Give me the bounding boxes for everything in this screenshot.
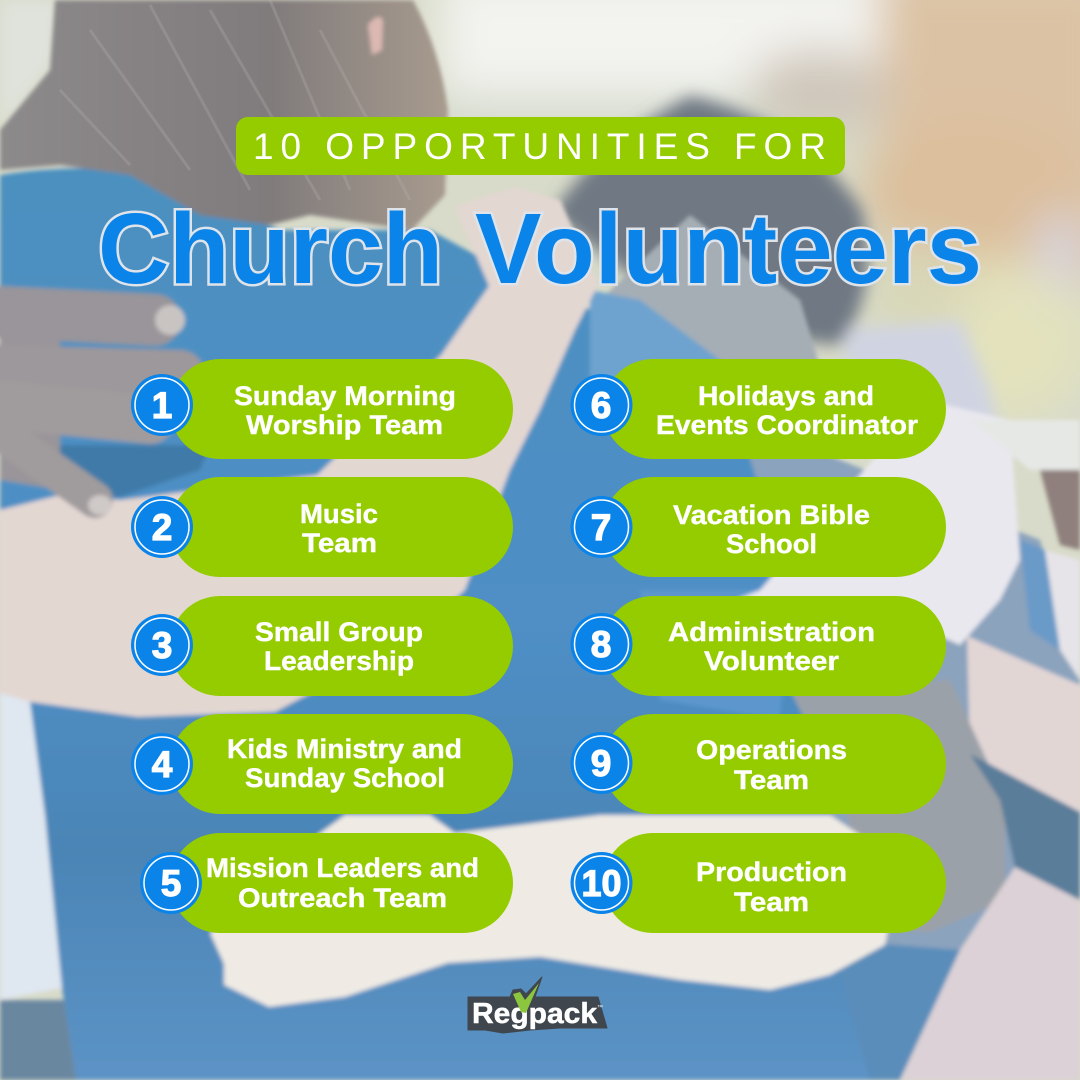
item 8: Administration Volunteer: 8 — [591, 624, 611, 665]
item 8: Administration Volunteer — [570, 596, 946, 696]
item 7: Vacation Bible School: Vacation Bible — [673, 500, 870, 530]
logo: Regpack — [468, 977, 607, 1033]
item 9: Operations Team: Team — [734, 765, 809, 795]
title: Church Volunteers — [98, 193, 982, 305]
item 9: Operations Team: Operations — [696, 735, 847, 765]
item 6: Holidays and Events Coordinator: 6 — [591, 385, 611, 426]
item 7: Vacation Bible School: School — [726, 529, 817, 559]
item 5: Mission Leaders and Outreach Team — [140, 833, 513, 933]
item 6: Holidays and Events Coordinator: Holidays and — [698, 381, 874, 411]
item 5: Mission Leaders and Outreach Team: Outreach Team — [238, 883, 447, 913]
item 5: Mission Leaders and Outreach Team: 5 — [161, 863, 181, 904]
item 3: Small Group Leadership: Small Group — [255, 617, 423, 647]
item 2: Music Team: Team — [302, 528, 377, 558]
item 4: Kids Ministry and Sunday School: Kids Ministry and — [227, 734, 462, 764]
item 5: Mission Leaders and Outreach Team: Mission Leaders and — [206, 853, 479, 883]
item 7: Vacation Bible School — [570, 477, 946, 577]
item 2: Music Team: 2 — [152, 507, 172, 548]
item 1: Sunday Morning Worship Team: 1 — [152, 385, 172, 426]
item 10: Production Team — [570, 833, 946, 933]
icon: green check mark — [513, 983, 539, 1013]
logo: Regpack: Regpack — [472, 998, 598, 1030]
item 10: Production Team: Team — [734, 887, 809, 917]
item 7: Vacation Bible School: 7 — [591, 507, 611, 548]
item 2: Music Team: Music — [300, 499, 378, 529]
logo: Regpack: ™ — [597, 1004, 603, 1011]
item 6: Holidays and Events Coordinator — [570, 359, 946, 459]
item 4: Kids Ministry and Sunday School: Sunday School — [245, 763, 445, 793]
item 1: Sunday Morning Worship Team — [131, 359, 513, 459]
item 4: Kids Ministry and Sunday School — [131, 714, 513, 814]
item 8: Administration Volunteer: Administration — [668, 617, 875, 647]
item 6: Holidays and Events Coordinator: Events Coordinator — [656, 410, 919, 440]
item 9: Operations Team: 9 — [591, 743, 611, 784]
banner: 10 opportunities for: 10 OPPORTUNITIES FOR — [253, 126, 826, 167]
item 10: Production Team: 10 — [582, 863, 622, 904]
item 3: Small Group Leadership: 3 — [152, 625, 172, 666]
item 3: Small Group Leadership — [131, 596, 513, 696]
item 9: Operations Team — [570, 714, 946, 814]
item 3: Small Group Leadership: Leadership — [264, 646, 414, 676]
item 1: Sunday Morning Worship Team: Worship Team — [246, 410, 443, 440]
item 1: Sunday Morning Worship Team: Sunday Morning — [234, 381, 456, 411]
item 8: Administration Volunteer: Volunteer — [704, 646, 840, 676]
banner: 10 opportunities for — [236, 117, 845, 175]
title: Church Volunteers: Church — [98, 193, 443, 305]
title: Church Volunteers: Volunteers — [475, 193, 982, 305]
item 2: Music Team — [131, 477, 513, 577]
item 4: Kids Ministry and Sunday School: 4 — [152, 744, 173, 785]
item 10: Production Team: Production — [696, 857, 847, 887]
